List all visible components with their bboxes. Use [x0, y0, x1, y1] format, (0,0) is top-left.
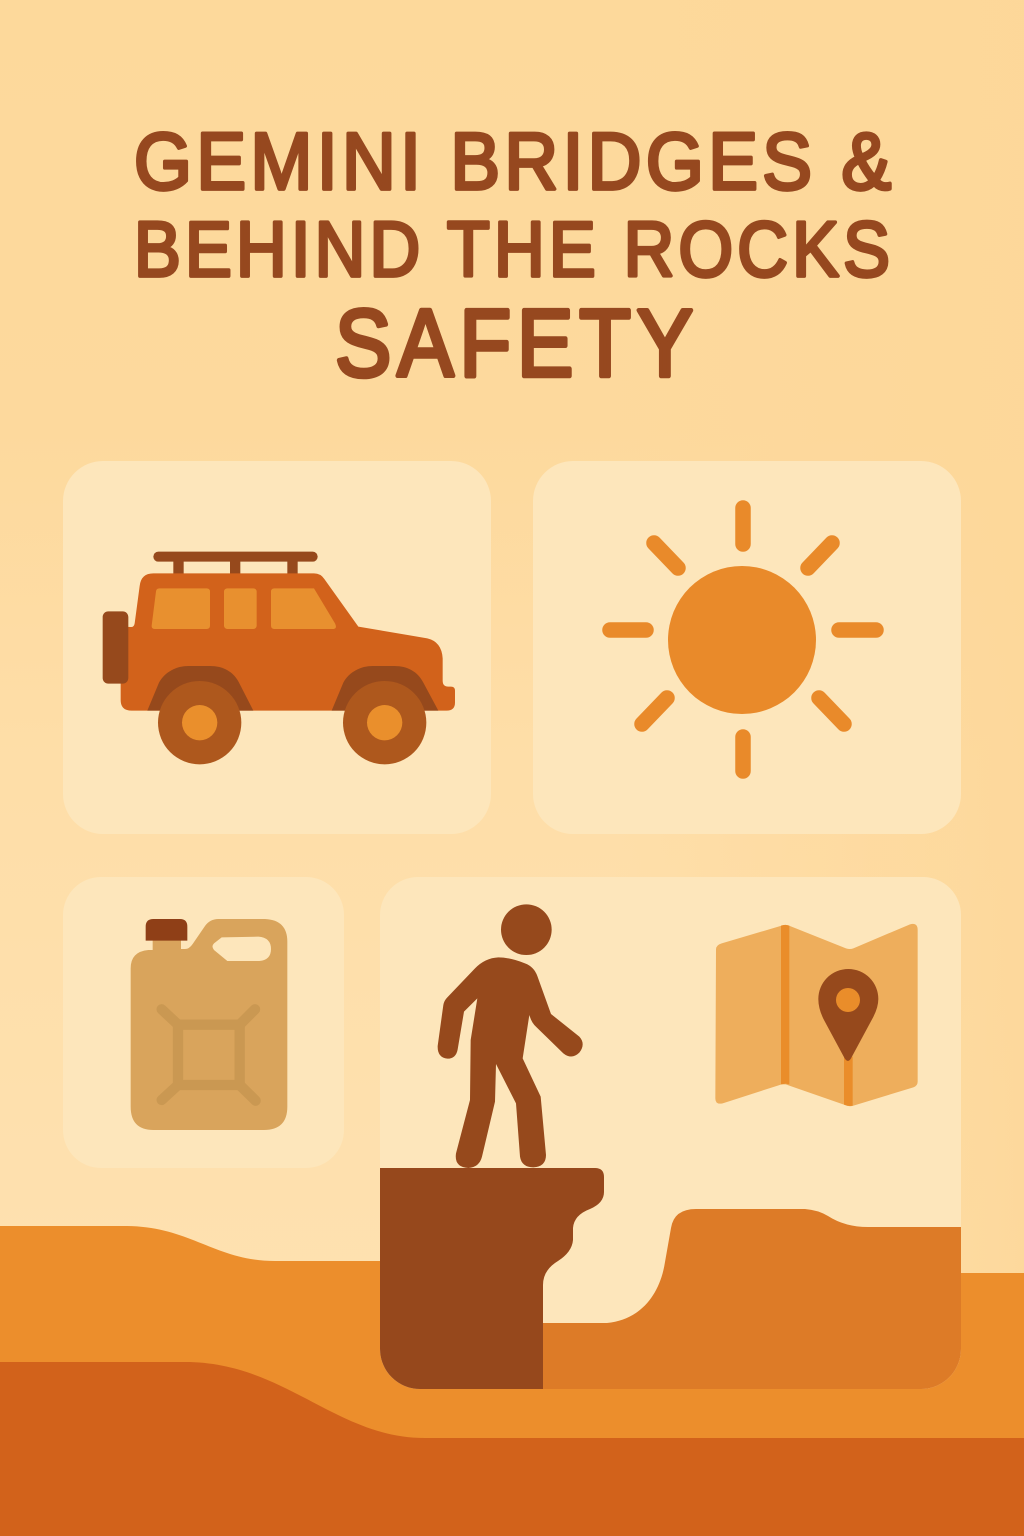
- panel background: [63, 877, 344, 1168]
- roof rack: [153, 552, 318, 575]
- icon: jerry can: [131, 919, 287, 1130]
- desert dune: back layer: [0, 1226, 1024, 1536]
- body: [438, 957, 583, 1168]
- panel: sun: [533, 461, 961, 834]
- panel: cliff edge and navigation: [380, 877, 961, 1389]
- rear wheel: [158, 681, 241, 764]
- icon: off-road vehicle: [103, 552, 455, 764]
- panel: fuel: [63, 877, 344, 1168]
- sun disc: [668, 566, 816, 714]
- front window: [271, 588, 336, 629]
- map fold: [781, 925, 789, 1084]
- title line 3: SAFETY: [335, 290, 693, 397]
- vehicle body: [121, 573, 455, 711]
- panel background: [63, 461, 491, 834]
- title: [134, 117, 891, 397]
- panel background: [533, 461, 961, 834]
- map fold lower: [844, 1057, 853, 1106]
- front wheel: [343, 681, 426, 764]
- icon: walking person: [438, 904, 583, 1168]
- icon: folded map with pin: [715, 924, 918, 1106]
- can body: [131, 919, 287, 1130]
- sun rays: [610, 508, 876, 771]
- icon: sun: [610, 508, 876, 771]
- cap: [146, 919, 187, 941]
- spare tire: [103, 611, 128, 684]
- map pin: [818, 969, 878, 1061]
- panel: vehicle: [63, 461, 491, 834]
- title line 1: GEMINI BRIDGES &: [134, 117, 891, 207]
- title line 2: BEHIND THE ROCKS: [134, 206, 890, 293]
- middle window: [224, 588, 257, 629]
- rear window: [152, 588, 210, 629]
- panel background: [380, 877, 961, 1389]
- cliff: [380, 1168, 604, 1389]
- desert dune: front layer: [0, 1362, 1024, 1536]
- rear wheel arch: [147, 666, 253, 711]
- front wheel arch: [332, 666, 438, 711]
- distant rock formation: [543, 1209, 961, 1389]
- head: [501, 904, 552, 955]
- embossed cross pattern: [162, 1009, 256, 1101]
- map sheet: [715, 924, 918, 1106]
